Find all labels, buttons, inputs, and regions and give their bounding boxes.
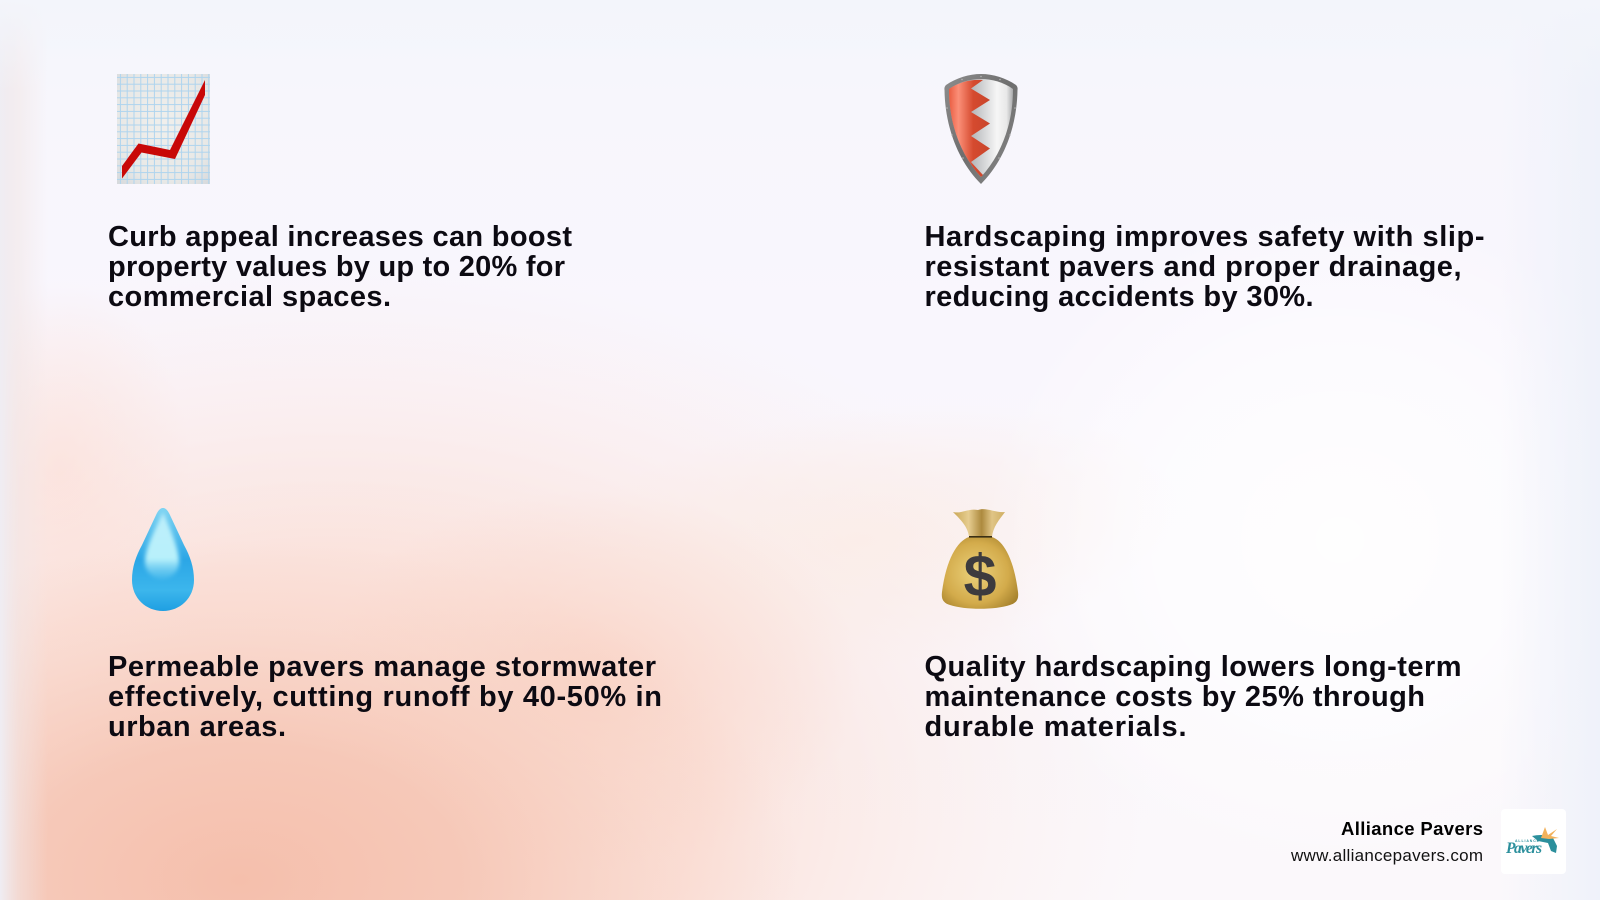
text: maintenance costs: maintenance costs by 25% through (924, 681, 1425, 713)
icon: rising chart (117, 74, 210, 184)
icon: water drop (132, 508, 194, 611)
text: stormwater: Permeable pavers manage stormwater (108, 651, 656, 683)
brand name: Alliance Pavers (1341, 818, 1483, 839)
text: safety: resistant pavers and proper drainage, (924, 251, 1462, 283)
text: curb appeal: Curb appeal increases can boost (108, 221, 572, 253)
icon: money bag (942, 509, 1018, 609)
text: safety: reducing accidents by 30%. (924, 281, 1314, 313)
website url: www.alliancepavers.com (1290, 846, 1483, 865)
logo card: ALLIANCE (1515, 839, 1540, 843)
panel: stormwater (108, 508, 662, 743)
text: curb appeal: property values by up to 20% for (108, 251, 565, 283)
text: maintenance costs: durable materials. (924, 711, 1186, 743)
logo card: Pavers (1506, 840, 1542, 857)
panel: safety (924, 74, 1484, 313)
icon: shield (944, 74, 1018, 184)
panel: curb appeal (108, 74, 572, 313)
text: stormwater: effectively, cutting runoff by 40-50% in (108, 681, 662, 713)
icon: money bag: $ (964, 543, 996, 609)
text: maintenance costs: Quality hardscaping lowers long-term (924, 651, 1462, 683)
text: safety: Hardscaping improves safety with slip- (924, 221, 1484, 253)
footer: brand (1290, 809, 1566, 874)
panel: maintenance costs (924, 509, 1462, 743)
text: curb appeal: commercial spaces. (108, 281, 391, 313)
text: stormwater: urban areas. (108, 711, 286, 743)
logo card (1501, 809, 1566, 874)
